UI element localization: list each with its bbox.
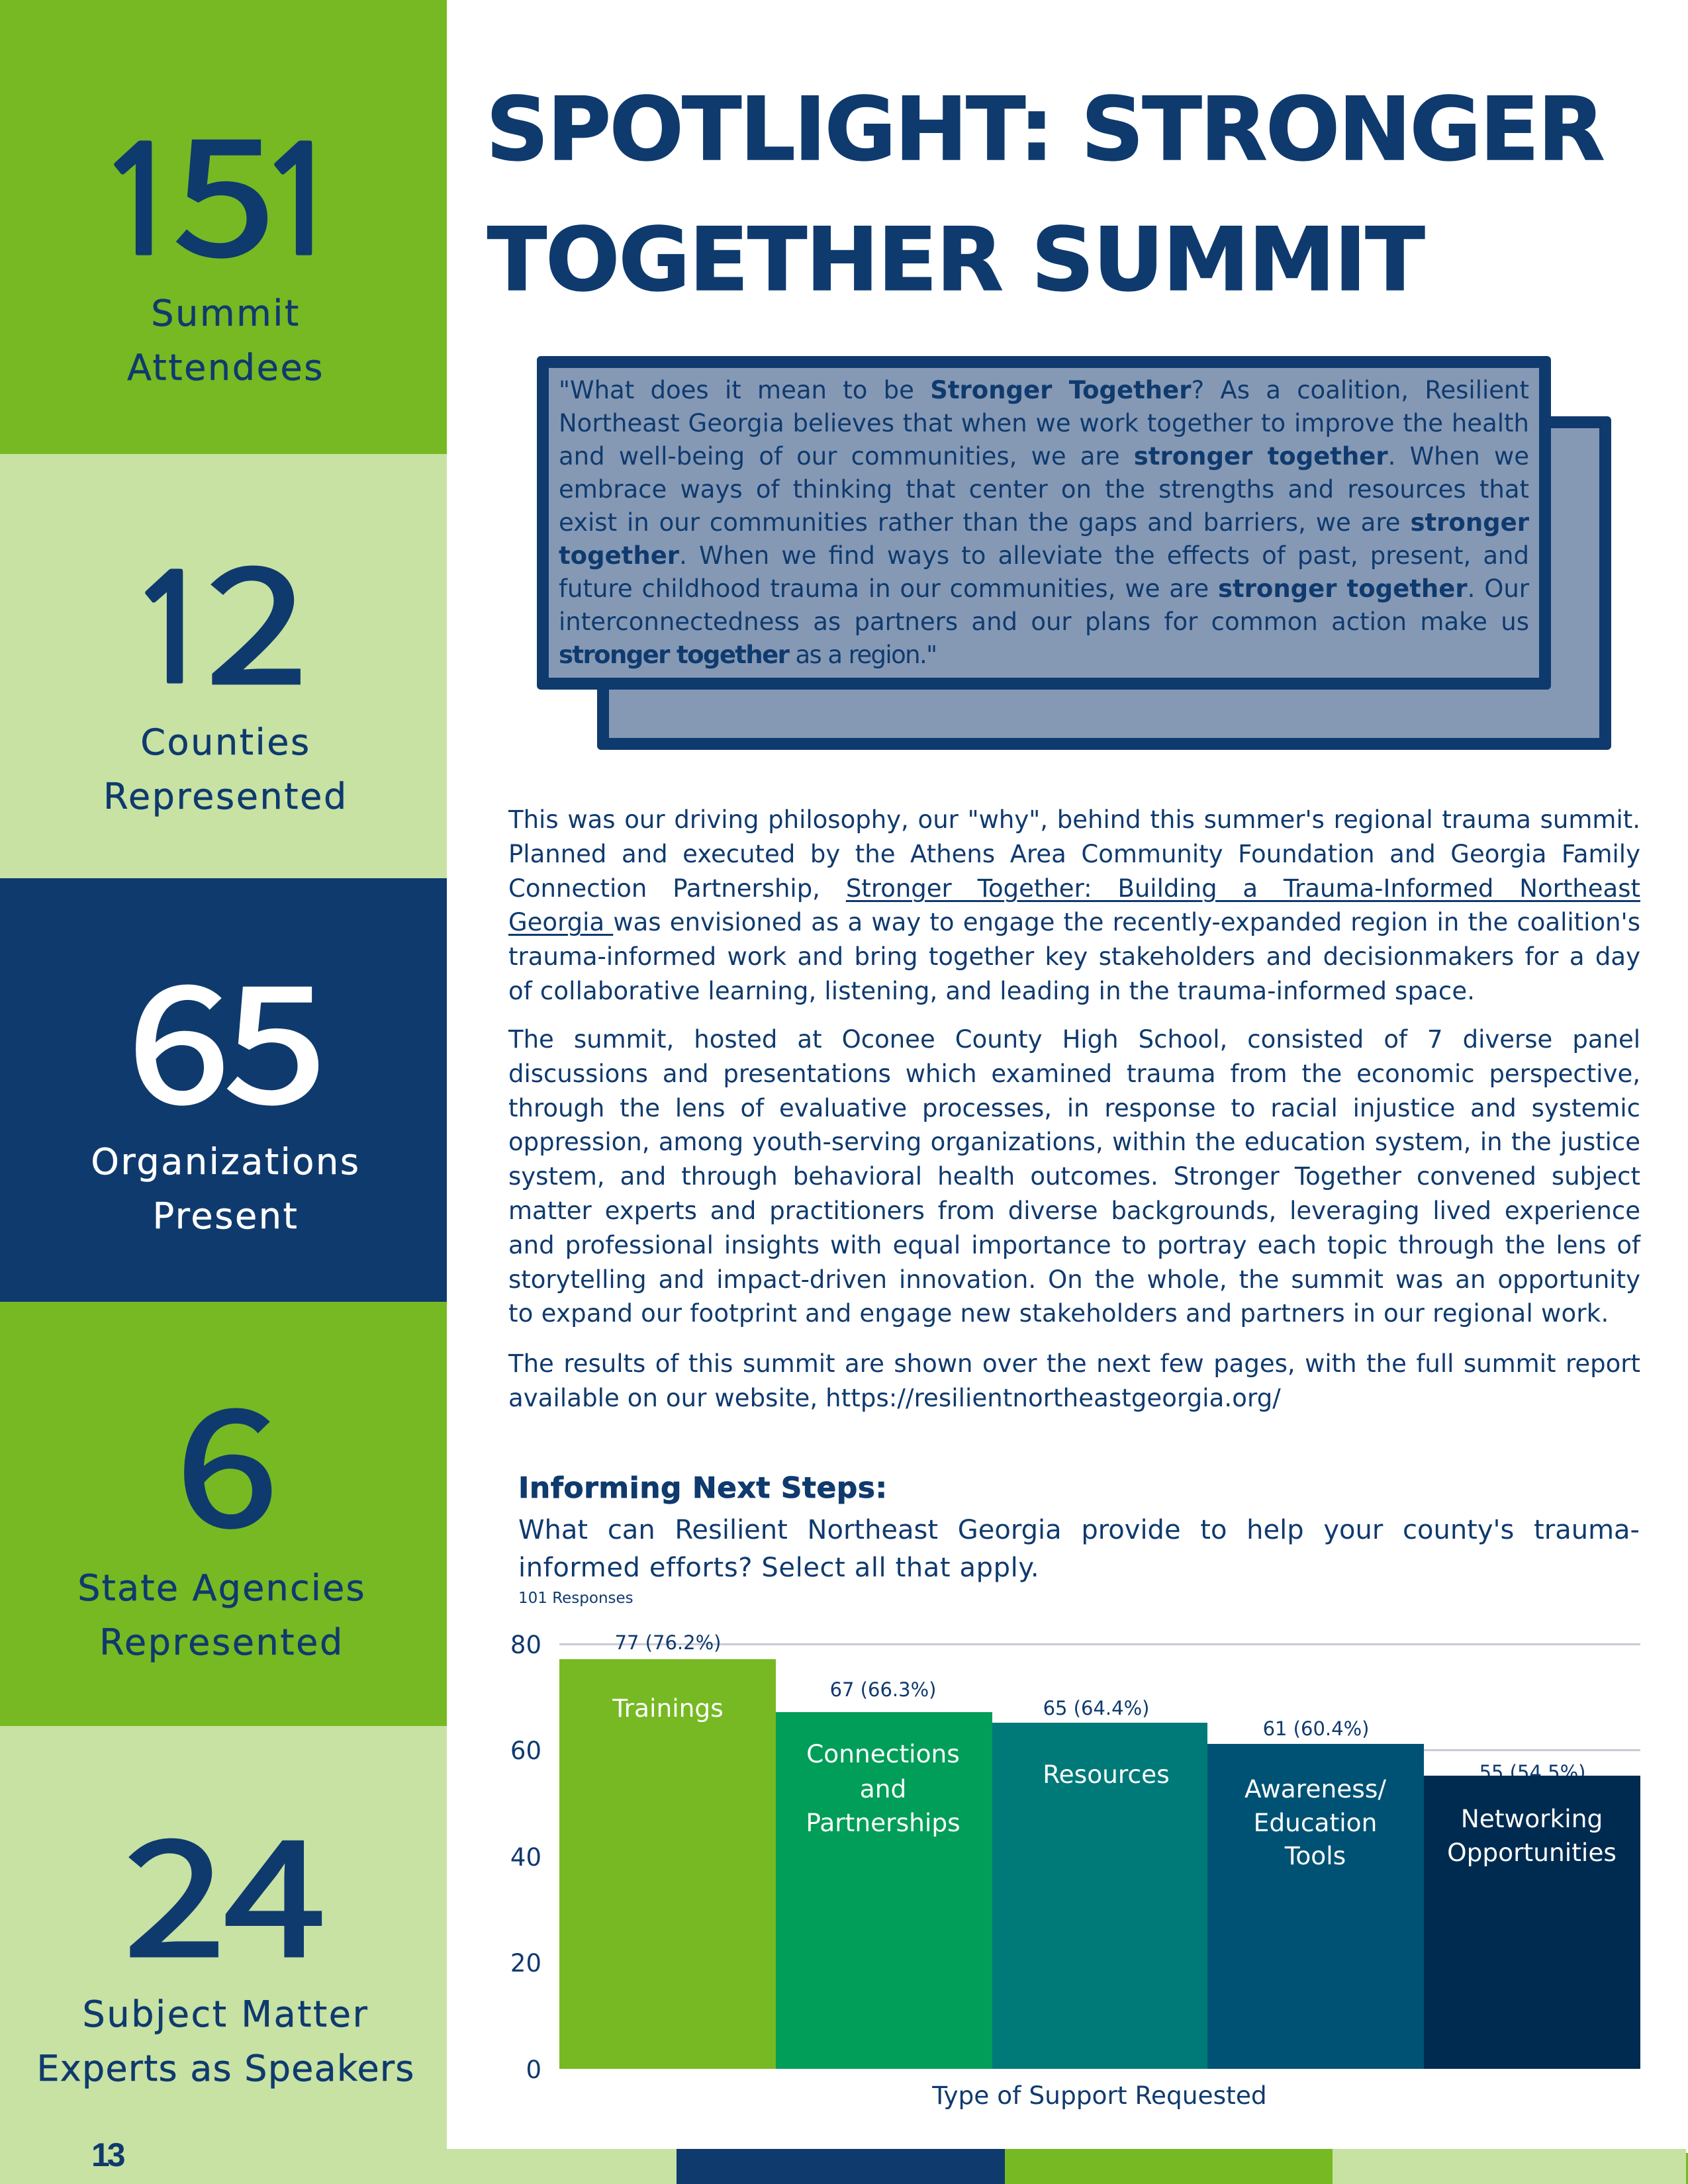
stat number 151: 5 xyxy=(173,70,275,301)
body paragraph 1: Georgia was envisioned as a way to engage the recently-expanded region in the coalition's xyxy=(508,908,1640,936)
stat label counties represented: Counties xyxy=(140,721,311,763)
body paragraph 2: discussions and presentations which examined trauma from the economic perspective, xyxy=(508,1060,1640,1088)
y axis labels: 20 xyxy=(510,1949,541,1978)
title: SPOTLIGHT: STRONGER xyxy=(486,79,1603,181)
chart heading: Informing Next Steps: xyxy=(518,1471,888,1505)
stat number 24: 2 xyxy=(124,1771,226,2002)
value labels: 55 (54.5%) xyxy=(1479,1761,1585,1784)
body paragraph 3: available on our website, https://resilientnortheastgeorgia.org/ xyxy=(508,1384,1281,1412)
body paragraph 1: of collaborative learning, listening, and leading in the trauma-informed space. xyxy=(508,977,1475,1005)
stat label subject matter experts as speakers: Experts as Speakers xyxy=(36,2048,415,2089)
value labels: 65 (64.4%) xyxy=(1043,1697,1149,1719)
bar labels: and xyxy=(860,1774,906,1803)
y axis labels: 80 xyxy=(510,1631,541,1659)
body paragraph 2: to expand our footprint and engage new stakeholders and partners in our regional work. xyxy=(508,1299,1609,1328)
body paragraph 2 xyxy=(508,1025,1641,1328)
value labels: 67 (66.3%) xyxy=(830,1678,936,1701)
quote text: interconnectedness as partners and our plans for common action make us xyxy=(559,608,1529,636)
stat label organizations present xyxy=(91,1141,361,1236)
body paragraph 2: through the lens of evaluative processes, in response to racial injustice and systemic xyxy=(508,1094,1640,1122)
x axis title: Type of Support Requested xyxy=(931,2081,1267,2110)
bar labels: Awareness/ xyxy=(1244,1774,1386,1803)
quote text: embrace ways of thinking that center on the strengths and resources that xyxy=(559,475,1529,504)
stat number 65: 5 xyxy=(224,917,326,1148)
stat label organizations present: Present xyxy=(153,1195,299,1236)
bar labels: Partnerships xyxy=(806,1808,961,1837)
footer block navy xyxy=(677,2149,1005,2184)
stat number 12 xyxy=(126,498,308,729)
body paragraph 2: oppression, among youth-serving organizations, within the education system, in the justice xyxy=(508,1128,1640,1156)
stat label subject matter experts as speakers: Subject Matter xyxy=(83,1993,369,2035)
quote text: exist in our communities rather than the gaps and barriers, we are stronger xyxy=(559,508,1529,537)
stat label counties represented xyxy=(103,721,348,817)
body paragraph 2: storytelling and impact-driven innovation. On the whole, the summit was an opportunity xyxy=(508,1265,1640,1294)
y axis labels: 60 xyxy=(510,1737,541,1765)
body paragraph 3: The results of this summit are shown over the next few pages, with the full summit report xyxy=(508,1349,1640,1378)
quote text: future childhood trauma in our communities, we are stronger together. Our xyxy=(559,574,1529,603)
panel: stat 24 subject matter experts xyxy=(0,1726,447,2184)
y axis labels: 40 xyxy=(510,1843,541,1872)
bar labels: Resources xyxy=(1043,1760,1170,1789)
bars xyxy=(559,1659,1640,2069)
bar labels xyxy=(612,1694,1617,1870)
stat label subject matter experts as speakers xyxy=(36,1993,415,2089)
bar labels: Tools xyxy=(1284,1841,1346,1870)
quote text: Northeast Georgia believes that when we work together to improve the health xyxy=(559,409,1529,437)
stat number 151: 1 xyxy=(255,128,346,277)
footer band: colour blocks xyxy=(447,2149,1686,2184)
bar labels: Trainings xyxy=(612,1694,724,1723)
quote text: "What does it mean to be Stronger Together? As a coalition, Resilient xyxy=(559,376,1529,404)
stat number 65: 6 xyxy=(128,917,230,1148)
stat number 151 xyxy=(95,70,346,301)
stat number 6: 6 xyxy=(176,1341,278,1572)
value labels: 61 (60.4%) xyxy=(1263,1717,1369,1740)
quote text xyxy=(559,376,1529,669)
y axis labels xyxy=(510,1631,541,2084)
y axis labels: 0 xyxy=(526,2056,541,2084)
bar labels: Networking xyxy=(1461,1804,1603,1833)
stat number 151: 1 xyxy=(95,128,186,277)
quote text: together. When we find ways to alleviate the effects of past, present, and xyxy=(559,541,1529,570)
stat label organizations present: Organizations xyxy=(91,1141,361,1183)
panel: stat 6 state agencies represented xyxy=(0,1302,447,1726)
panel: quote box xyxy=(537,356,1551,690)
stat label state agencies represented: State Agencies xyxy=(77,1567,366,1609)
body paragraph 1: trauma-informed work and bring together key stakeholders and decisionmakers for a day xyxy=(508,942,1640,971)
title: TOGETHER SUMMIT xyxy=(487,209,1424,311)
body paragraph 1: This was our driving philosophy, our "why", behind this summer's regional trauma summit. xyxy=(508,805,1640,834)
body paragraph 2: system, and through behavioral health outcomes. Stronger Together convened subject xyxy=(508,1162,1640,1191)
quote text: stronger together as a region." xyxy=(559,641,937,669)
panel: back offset box xyxy=(597,416,1611,750)
panel: stat 12 counties represented xyxy=(0,454,447,878)
panel: stat 151 summit attendees xyxy=(0,0,447,454)
value labels xyxy=(615,1631,1585,1784)
stat label state agencies represented: Represented xyxy=(99,1621,344,1662)
stat label summit attendees: Summit xyxy=(151,293,301,334)
chart question: What can Resilient Northeast Georgia provide to help your county's trauma- xyxy=(518,1515,1640,1545)
body paragraph 2: and professional insights with equal importance to portray each topic through the lens of xyxy=(508,1231,1640,1259)
stat label summit attendees xyxy=(127,293,324,388)
footer edge strip xyxy=(1686,2153,1688,2184)
body paragraph 2: matter experts and practitioners from diverse backgrounds, leveraging lived experience xyxy=(508,1197,1640,1225)
stat label summit attendees: Attendees xyxy=(127,347,324,388)
responses note: 101 Responses xyxy=(518,1590,633,1607)
page number: 13 xyxy=(91,2136,123,2173)
stat label counties represented: Represented xyxy=(103,776,348,817)
bar chart xyxy=(510,1631,1640,2110)
title xyxy=(486,79,1604,311)
stat number 12: 1 xyxy=(126,556,217,705)
stat number 12: 2 xyxy=(206,498,308,729)
body paragraph 1 xyxy=(508,805,1640,1005)
gridlines xyxy=(559,1643,1640,1751)
footer block green xyxy=(1005,2149,1333,2184)
chart question xyxy=(518,1515,1640,1583)
body paragraph 1: Planned and executed by the Athens Area Community Foundation and Georgia Family xyxy=(508,840,1640,868)
stat label state agencies represented xyxy=(77,1567,366,1662)
value labels: 77 (76.2%) xyxy=(615,1631,721,1654)
bar labels: Connections xyxy=(806,1739,960,1768)
bar labels: Education xyxy=(1254,1808,1377,1837)
body paragraph 3 xyxy=(508,1349,1640,1412)
chart question: informed efforts? Select all that apply. xyxy=(518,1553,1039,1583)
quote text: and well-being of our communities, we are stronger together. When we xyxy=(559,442,1529,471)
stat number 24: 4 xyxy=(224,1771,326,2002)
body paragraph 2: The summit, hosted at Oconee County High School, consisted of 7 diverse panel xyxy=(508,1025,1640,1054)
bar labels: Opportunities xyxy=(1447,1838,1617,1867)
panel: stat 65 organizations present xyxy=(0,878,447,1302)
stat number 24 xyxy=(124,1771,326,2002)
stat number 65 xyxy=(128,917,326,1148)
body paragraph 1: Connection Partnership, Stronger Together: Building a Trauma-Informed Northeast xyxy=(508,874,1640,903)
